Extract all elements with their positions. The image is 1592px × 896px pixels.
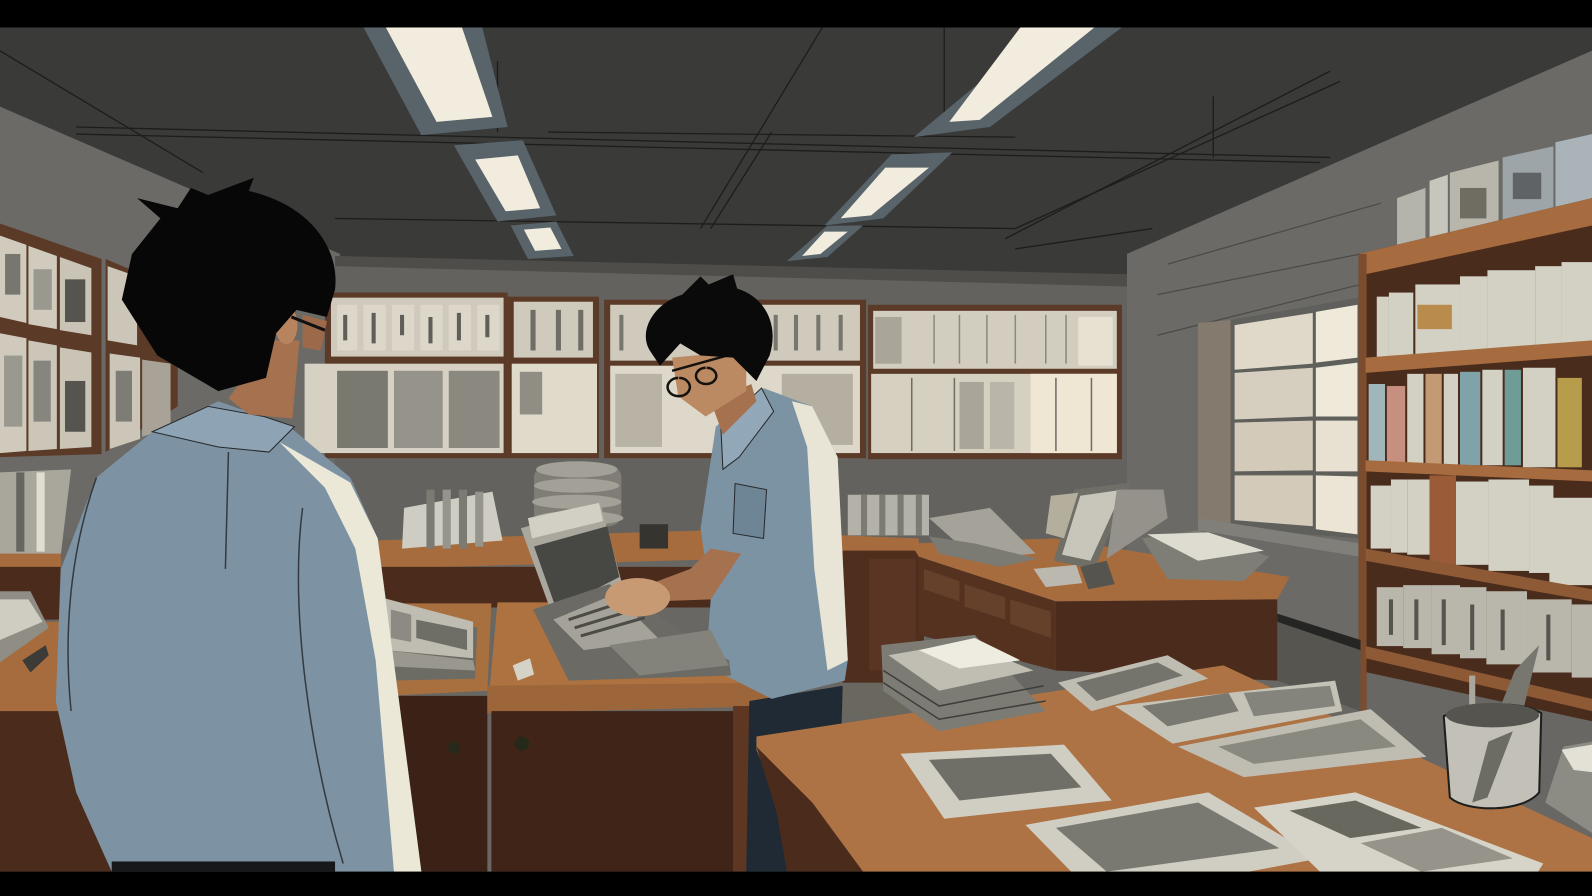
centre desk bbox=[487, 602, 774, 872]
centre man bbox=[646, 274, 848, 872]
papers at right edge bbox=[1545, 742, 1592, 833]
laptop bbox=[521, 503, 731, 681]
papers on left desks bbox=[0, 591, 477, 681]
neck bbox=[711, 384, 756, 435]
trousers bbox=[746, 686, 843, 872]
trousers hint bbox=[112, 861, 335, 872]
face sliver and glasses bbox=[303, 315, 327, 350]
open newspapers on front table bbox=[901, 655, 1543, 872]
floor and right wall base bbox=[838, 614, 1361, 716]
left background desk bbox=[0, 469, 71, 620]
stacked papers on front table bbox=[881, 635, 1046, 731]
foreground man bbox=[56, 178, 421, 872]
items on right desk bbox=[929, 483, 1269, 589]
right bookshelf bbox=[1358, 198, 1592, 721]
shirt highlight bbox=[279, 442, 421, 872]
back wall notice boards bbox=[305, 293, 1122, 459]
face bbox=[672, 350, 746, 417]
hair bbox=[122, 178, 336, 391]
boxes on top of right shelf bbox=[1397, 134, 1592, 248]
ceiling lights left bbox=[363, 27, 574, 259]
arm bbox=[650, 549, 741, 601]
shirt bbox=[56, 401, 421, 872]
pen cup bbox=[1444, 645, 1541, 808]
left wall notice boards bbox=[0, 223, 178, 457]
hair bbox=[646, 274, 773, 381]
sleeve seam bbox=[68, 452, 343, 863]
ceiling lights right bbox=[787, 27, 1122, 261]
binders and stacks on back counter bbox=[402, 461, 929, 549]
collar bbox=[152, 406, 294, 452]
window bbox=[1198, 298, 1361, 557]
back counter bbox=[376, 530, 924, 683]
neck and ear bbox=[228, 340, 300, 419]
front right table bbox=[756, 665, 1592, 872]
right middle desk bbox=[911, 538, 1289, 681]
foreground left desks bbox=[0, 603, 491, 872]
shirt bbox=[701, 388, 848, 699]
glasses bbox=[668, 356, 727, 396]
